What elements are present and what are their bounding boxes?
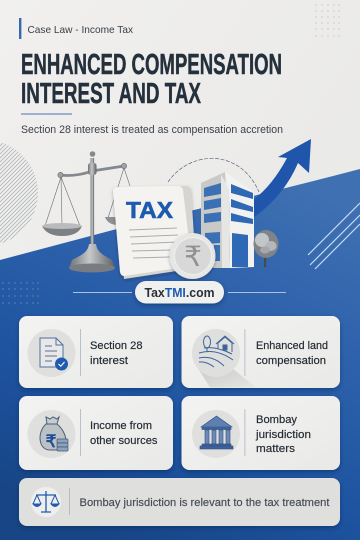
- panel: Bombay jurisdiction matters: Bombay: [256, 414, 298, 426]
- dashed arc: [168, 158, 259, 192]
- subtitle: Section 28 interest is treated as compensation accretion: [21, 124, 283, 136]
- icon: growth arrow: [253, 139, 311, 218]
- icon: document with check: [40, 338, 68, 370]
- panel: Enhanced land compensation: [182, 316, 340, 388]
- icon: small scales: [33, 491, 59, 512]
- diagonal lines right: [308, 203, 360, 269]
- panel: footer note: Bombay jurisdiction is relevant to the tax treatment: [80, 497, 330, 509]
- hatched circle left: [0, 142, 38, 244]
- panel: Section 28 interest: Section 28: [90, 340, 142, 352]
- panel: Section 28 interest: [19, 316, 173, 388]
- panel: Section 28 interest: interest: [90, 355, 128, 367]
- blue background wave: [0, 169, 360, 540]
- brand pill: [73, 281, 286, 304]
- icon: court building: [200, 416, 233, 449]
- panel: Bombay jurisdiction matters: matters: [256, 443, 296, 455]
- icon: land and house: [199, 336, 234, 367]
- brand pill: TaxTMI.com: [144, 285, 214, 300]
- panel: footer note: [19, 478, 340, 526]
- icon: tax document: [113, 186, 196, 279]
- panel: Bombay jurisdiction matters: jurisdiction: [255, 429, 311, 441]
- icon: money bag: [40, 417, 68, 451]
- icon: tree: [254, 230, 278, 267]
- eyebrow label: [19, 18, 134, 39]
- panel: Income from other sources: [19, 396, 173, 470]
- title: INTEREST AND TAX: [21, 78, 201, 110]
- icon: rupee coin: [170, 233, 216, 279]
- panel: Bombay jurisdiction matters: [182, 396, 340, 470]
- icon: money bag: ₹: [46, 432, 57, 451]
- dot pattern lower left: [2, 282, 39, 304]
- eyebrow label: Case Law - Income Tax: [28, 25, 134, 36]
- dot pattern top right: [315, 4, 340, 37]
- title: [21, 49, 282, 110]
- icon: scales of justice: [42, 151, 130, 272]
- icon: building: [201, 172, 254, 268]
- panel: Income from other sources: Income from: [90, 420, 152, 432]
- tax heading: TAX: [126, 197, 173, 223]
- panel: Enhanced land compensation: compensation: [256, 355, 326, 367]
- icon: rupee coin: ₹: [184, 241, 202, 272]
- panel: Enhanced land compensation: Enhanced land: [256, 340, 328, 352]
- panel: Income from other sources: other sources: [90, 435, 158, 447]
